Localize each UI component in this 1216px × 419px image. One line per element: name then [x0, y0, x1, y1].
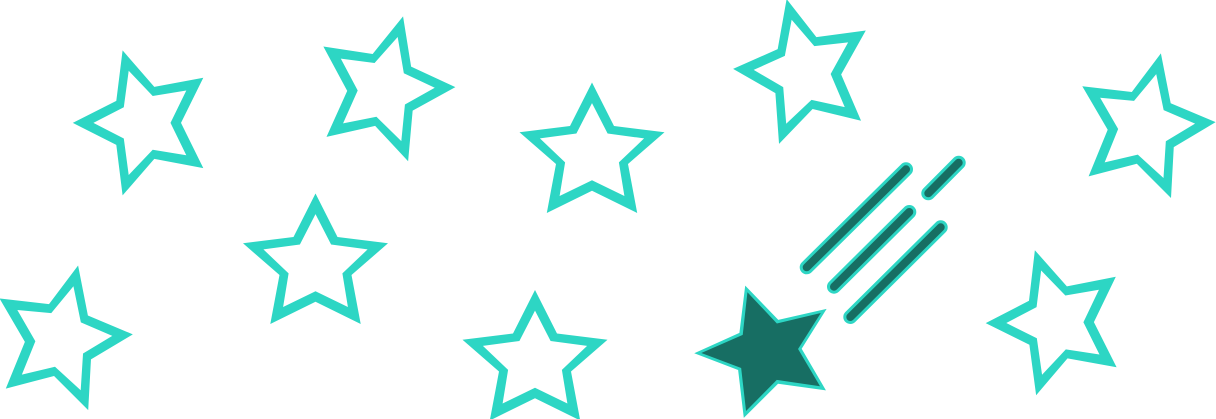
icon: outline star, middle left [243, 194, 388, 324]
shooting star trail [807, 163, 959, 317]
icon: outline star, lower left corner [0, 262, 138, 416]
icon: outline star, top centre left [322, 15, 458, 164]
icon: shooting star [679, 163, 959, 419]
icon: outline star, centre [520, 82, 664, 213]
shooting star head [679, 263, 851, 419]
icon: outline star, lower right [985, 249, 1117, 396]
icon: outline star, upper left [73, 50, 203, 195]
icon: outline star, bottom centre [462, 290, 608, 419]
icon: outline star, upper right [1080, 50, 1216, 204]
icon: outline star, top centre right [729, 0, 867, 148]
